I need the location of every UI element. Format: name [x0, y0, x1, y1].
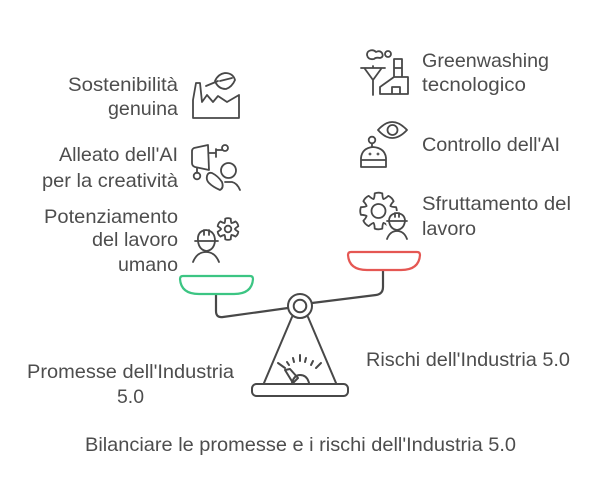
label: Sostenibilità genuina: genuina: [108, 99, 178, 120]
icon: greenwashing industry: [361, 50, 408, 95]
label: Promesse dell'Industria 5.0: 5.0: [117, 387, 144, 408]
label: Potenziamento del lavoro umano: umano: [118, 255, 178, 276]
label: Sfruttamento del lavoro: [422, 194, 571, 240]
label: Promesse dell'Industria 5.0: [27, 362, 234, 408]
right pan: red: [348, 252, 420, 270]
label: Alleato dell'AI per la creatività: Alleato dell'AI: [59, 145, 178, 166]
icon: AI and creativity: [192, 145, 240, 190]
scale beam: [216, 271, 383, 317]
label: Rischi dell'Industria 5.0: Rischi dell'Industria 5.0: [366, 350, 570, 371]
label: Greenwashing tecnologico: tecnologico: [422, 75, 526, 96]
label: Sostenibilità genuina: Sostenibilità: [68, 75, 178, 96]
label: Promesse dell'Industria 5.0: Promesse dell'Industria: [27, 362, 234, 383]
icon: worker with gear: [193, 218, 239, 262]
label: Potenziamento del lavoro umano: [44, 207, 178, 276]
label: Controllo dell'AI: Controllo dell'AI: [422, 135, 560, 156]
icon: factory with leaf: [193, 73, 239, 118]
label: Sostenibilità genuina: [68, 75, 178, 120]
icon: eye and robot: [361, 122, 407, 167]
label: Greenwashing tecnologico: [422, 51, 549, 96]
label: Potenziamento del lavoro umano: del lavoro: [92, 230, 178, 251]
label: Alleato dell'AI per la creatività: [42, 145, 178, 192]
label: Greenwashing tecnologico: Greenwashing: [422, 51, 549, 72]
title: Bilanciare le promesse e i rischi: Bilanciare le promesse e i rischi dell'Industria 5.0: [85, 435, 516, 456]
label: Sfruttamento del lavoro: lavoro: [422, 219, 476, 240]
icon: gear with worker: [360, 193, 408, 239]
label: Potenziamento del lavoro umano: Potenziamento: [44, 207, 178, 228]
label: Alleato dell'AI per la creatività: per la creatività: [42, 171, 178, 192]
label: Sfruttamento del lavoro: Sfruttamento del: [422, 194, 571, 215]
left pan: green: [180, 276, 253, 294]
scale base with gauge: [252, 294, 348, 396]
